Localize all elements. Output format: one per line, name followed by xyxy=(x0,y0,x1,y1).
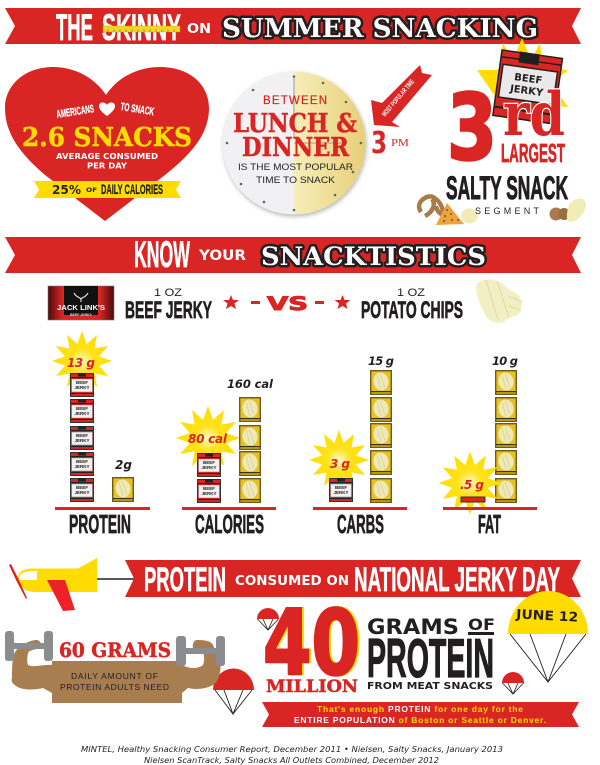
icon: small parachute right xyxy=(502,672,524,694)
jerky bag: JERKY xyxy=(333,490,349,495)
icon: potato chip xyxy=(476,279,522,323)
text: 1 oz beef jerky: 1 OZ xyxy=(154,287,182,299)
panel: clock lunch and dinner: IS THE MOST POPULAR xyxy=(238,162,354,172)
text: 3 pm: 3 xyxy=(371,126,387,161)
arrow: most popular time xyxy=(371,65,432,127)
text: 1 oz beef jerky xyxy=(125,287,212,324)
jerky bag stack xyxy=(198,453,220,502)
banner: protein consumed on national jerky day: PROTEIN xyxy=(144,561,226,599)
banner: protein consumed on national jerky day: CONSUMED ON xyxy=(235,574,349,589)
panel: clock lunch and dinner: TIME TO SNACK xyxy=(256,175,335,185)
label: protein: PROTEIN xyxy=(69,509,131,539)
chart: fat: FAT xyxy=(478,509,501,539)
footer: sources: MINTEL, Healthy Snacking Consumer Report, December 2011 • Nielsen, Salty Snacks, January 2013 xyxy=(81,745,503,754)
jerky bag stack xyxy=(70,373,94,502)
stat: 40 million: 40 xyxy=(263,591,360,696)
text: grams of protein from meat snacks: OF xyxy=(468,615,495,634)
callout ribbon: enough protein: That's enough PROTEIN for one day for the xyxy=(317,704,523,714)
burst: 80 cal xyxy=(176,406,240,470)
thin jerky bag xyxy=(461,497,485,502)
footer: sources xyxy=(81,745,503,765)
panel: heart with snack stats: PER DAY xyxy=(87,162,127,170)
axis line xyxy=(313,507,407,510)
chip bag stack xyxy=(240,398,260,502)
icon: muscle man with dumbbells, 60 grams xyxy=(5,631,225,703)
icon: muscle man with dumbbells, 60 grams: DAILY AMOUNT OF xyxy=(71,671,158,681)
text: 1 oz potato chips: POTATO CHIPS xyxy=(361,297,463,324)
jerky bag stack: BEEF xyxy=(76,406,88,411)
text: 3rd largest salty snack segment: SEGMENT xyxy=(475,206,540,216)
axis line xyxy=(182,507,276,510)
arrow: most popular time: MOST POPULAR TIME xyxy=(381,78,416,118)
icon: beef jerky bag with star: BEEF xyxy=(514,72,543,87)
jerky bag stack: JERKY xyxy=(74,411,90,416)
panel: clock lunch and dinner: BETWEEN xyxy=(263,95,327,107)
axis line xyxy=(443,507,537,510)
panel: heart with snack stats: AVERAGE CONSUMED xyxy=(56,152,158,161)
icon: small parachute top xyxy=(257,608,279,630)
label: calories: CALORIES xyxy=(195,509,264,539)
jerky bag stack: BEEF xyxy=(76,485,88,490)
versus divider xyxy=(223,293,350,315)
banner: know your snacktistics: YOUR xyxy=(198,248,246,264)
text: 3rd largest salty snack segment: rd xyxy=(503,80,565,150)
chart: protein xyxy=(52,331,150,539)
text: 3 pm: PM xyxy=(391,138,409,149)
jerky bag stack: JERKY xyxy=(74,438,90,443)
jerky bag stack: BEEF xyxy=(203,486,215,491)
jerky bag stack: JERKY xyxy=(74,385,90,390)
jerky bag stack: BEEF xyxy=(76,380,88,385)
panel: heart with snack stats: 2.6 SNACKS xyxy=(22,123,192,153)
banner: protein consumed on national jerky day xyxy=(125,560,581,599)
callout ribbon: enough protein: ENTIRE POPULATION of Boston or Seattle or Denver. xyxy=(294,715,546,725)
text: 1 oz potato chips: 1 OZ xyxy=(397,287,425,299)
text: grams of protein from meat snacks: FROM MEAT SNACKS xyxy=(367,681,493,692)
icon: plane towing banner xyxy=(9,558,134,611)
text: 3rd largest salty snack segment xyxy=(446,76,568,216)
versus divider: VS xyxy=(267,293,308,315)
chart: carbs xyxy=(309,354,407,539)
banner: the skinny on summer snacking: SUMMER SNACKING xyxy=(222,14,538,44)
icon: pretzel, chips and nuts xyxy=(419,196,586,225)
stat: 40 million: MILLION xyxy=(266,677,358,696)
value: 13 g: 13 g xyxy=(67,356,95,370)
logo: jack link's: BEEF JERKY xyxy=(70,313,93,317)
banner: know your snacktistics: KNOW xyxy=(134,234,190,275)
jerky bag stack: BEEF xyxy=(76,433,88,438)
footer: sources: Nielsen ScanTrack, Salty Snacks All Outlets Combined, December 2012 xyxy=(144,756,439,765)
icon: beef jerky bag with star: JERKY xyxy=(508,83,544,99)
logo: jack link's xyxy=(48,286,114,320)
banner: the skinny on summer snacking xyxy=(5,7,581,48)
icon: muscle man with dumbbells, 60 grams: PROTEIN ADULTS NEED xyxy=(60,682,169,692)
value: 2 g: 2 g xyxy=(115,458,132,472)
icon: medium parachute xyxy=(213,668,254,714)
jerky bag stack: JERKY xyxy=(74,490,90,495)
burst: 3 g xyxy=(309,430,369,490)
axis line xyxy=(55,507,150,510)
callout ribbon: enough protein xyxy=(262,702,579,727)
jerky bag xyxy=(330,478,352,502)
panel: clock lunch and dinner: DINNER xyxy=(242,133,349,163)
jerky bag stack: JERKY xyxy=(201,491,217,496)
icon: beef jerky bag with star xyxy=(477,38,568,125)
jerky bag stack: JERKY xyxy=(201,465,217,470)
chip bag stack xyxy=(496,371,516,502)
value: 10 g: 10 g xyxy=(492,354,518,368)
text: 3rd largest salty snack segment: 3 xyxy=(447,76,497,181)
burst: .5 g xyxy=(438,452,502,514)
panel: clock lunch and dinner xyxy=(222,72,366,214)
text: 1 oz potato chips xyxy=(361,287,463,324)
chart: calories xyxy=(176,377,276,539)
value: 15 g: 15 g xyxy=(368,354,394,368)
panel: heart with snack stats: DAILY CALORIES xyxy=(101,181,163,197)
chart: fat xyxy=(438,354,537,539)
jerky bag stack: JERKY xyxy=(74,464,90,469)
parachute: june 12 xyxy=(508,591,588,682)
text: 3 pm xyxy=(371,126,409,161)
text: 1 oz beef jerky: BEEF JERKY xyxy=(125,297,212,324)
panel: heart with snack stats: 25% xyxy=(52,183,81,197)
text: grams of protein from meat snacks: GRAMS xyxy=(367,615,459,639)
value: 3 g: 3 g xyxy=(330,457,350,471)
value: 160 cal: 160 cal xyxy=(227,377,274,391)
jerky bag stack: BEEF xyxy=(203,460,215,465)
panel: heart with snack stats: TO SNACK xyxy=(120,101,155,118)
chip bag stack xyxy=(371,371,391,502)
burst: 13 g xyxy=(52,331,112,391)
panel: heart with snack stats: OF xyxy=(86,187,97,194)
label: carbs: CARBS xyxy=(337,509,384,539)
parachute: june 12: JUNE 12 xyxy=(515,607,579,626)
value: 80 cal: 80 cal xyxy=(188,432,228,446)
panel: heart with snack stats: AMERICANS xyxy=(56,103,95,121)
text: grams of protein from meat snacks xyxy=(367,615,495,692)
chip bag xyxy=(113,478,133,501)
banner: know your snacktistics: SNACKTISTICS xyxy=(261,242,486,271)
banner: the skinny on summer snacking: ON xyxy=(187,22,211,37)
banner: know your snacktistics xyxy=(5,234,581,275)
banner: the skinny on summer snacking: THE xyxy=(56,7,93,48)
stat: 40 million: 40 xyxy=(265,591,362,696)
value: .5 g: .5 g xyxy=(460,478,484,492)
panel: clock lunch and dinner: LUNCH & xyxy=(233,109,357,139)
jerky bag stack: BEEF xyxy=(76,459,88,464)
logo: jack link's: JACK LINK'S xyxy=(57,303,105,312)
icon: muscle man with dumbbells, 60 grams: 60 GRAMS xyxy=(59,638,171,662)
banner: the skinny on summer snacking: SKINNY xyxy=(102,7,181,48)
jerky bag: BEEF xyxy=(335,485,347,490)
panel: heart with snack stats xyxy=(5,67,209,221)
